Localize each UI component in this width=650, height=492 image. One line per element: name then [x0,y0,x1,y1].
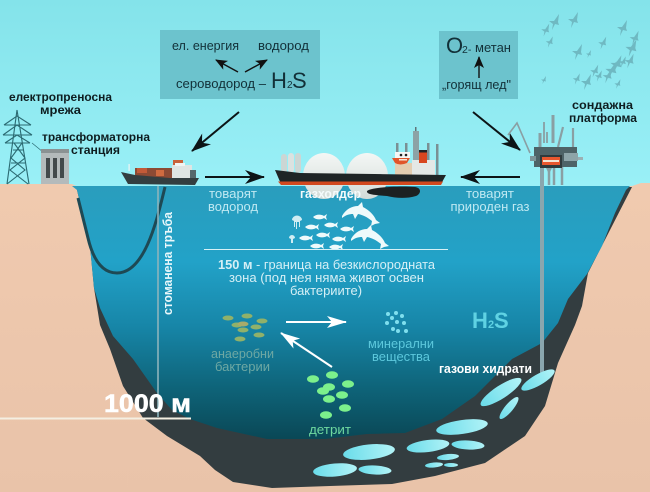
oil slick under gas holder [367,187,420,198]
label: transformer station [42,130,150,157]
label: cargo natural gas: товарят [466,186,514,201]
label: transformer station: станция [71,143,120,157]
icon: gas holder ship [275,127,446,199]
panel: methane from burning ice: метан [475,41,511,55]
icon: power pylon [3,110,43,184]
panel: hydrogen sulfide uses: сероводород – [176,77,266,91]
arrow: hydrogen cargo to gas holder [205,176,264,178]
panel: methane from burning ice: O [446,33,463,58]
label: gas holder: газхолдер [300,187,361,201]
label: H2S in deep water: S [494,308,509,333]
label: gas hydrates: газови хидрати [439,362,532,376]
label: mineral substances: вещества [372,349,431,364]
arrow: natural gas cargo to gas holder [461,176,520,178]
icon: dolphins [342,202,389,249]
pipe: steel pipe [157,186,159,417]
arrow: methane panel to platform [473,112,520,150]
label: cargo natural gas [450,186,530,214]
label: H2S in deep water: H [472,308,488,333]
icon: transformer station [41,149,69,184]
text: 150 m anoxic zone boundary [218,257,436,298]
icon: detritus [307,371,354,419]
panel: hydrogen sulfide uses: 2 [287,80,293,91]
cable: flexible hose to shore [78,187,165,273]
label: mineral substances [368,336,434,364]
arrow: detritus to bacteria [281,333,332,367]
gas hydrate deposits [313,366,557,478]
label: drilling platform: платформа [569,111,637,125]
label: power grid: мрежа [40,103,81,117]
panel: methane from burning ice [439,31,518,99]
icon: flock of birds [541,12,639,90]
label: anaerobic bacteria [211,346,274,374]
label: cargo hydrogen: товарят [209,186,257,201]
text: 150 m anoxic zone boundary: зона (под нея няма живот освен [229,270,424,285]
label: cargo hydrogen: водород [208,199,258,214]
label: mineral substances: минерални [368,336,434,351]
panel: methane from burning ice: 2- [462,44,472,56]
panel: methane from burning ice: „горящ лед" [442,78,511,92]
depth marker: 1000 m: 1000 м [104,390,191,418]
icon: drilling platform [508,115,583,185]
text: 150 m anoxic zone boundary: бактериите) [290,283,362,298]
sky [0,0,650,187]
sea water [72,186,630,439]
panel: hydrogen sulfide uses: S [292,68,307,93]
label: anaerobic bacteria: анаеробни [211,346,274,361]
panel: hydrogen sulfide uses: ел. енергия [172,39,239,53]
label: steel pipe: стоманена тръба [161,211,175,315]
divider: 150 m boundary line [204,248,448,250]
icon: anaerobic bacteria [222,314,268,342]
icon: marine life [289,202,389,250]
panel: hydrogen sulfide uses: водород [258,39,310,53]
label: H2S in deep water: 2 [488,319,494,331]
arrow: H2S panel to tanker [192,112,239,151]
label: drilling platform [569,98,637,125]
label: drilling platform: сондажна [572,98,633,112]
label: transformer station: трансформаторна [42,130,150,144]
arrow: bacteria to minerals [286,321,346,323]
label: anaerobic bacteria: бактерии [215,359,270,374]
label: cargo hydrogen [208,186,258,214]
text: 150 m anoxic zone boundary: 150 м - граница на безкислородната [218,257,436,272]
label: cargo natural gas: природен газ [450,199,530,214]
label: power grid [9,90,112,117]
land: seabed rock and coasts [0,183,650,492]
icon: hydrogen tanker ship [121,160,199,185]
panel: hydrogen sulfide uses: H [271,68,287,93]
label: power grid: електропреносна [9,90,112,104]
icon: mineral particles [385,311,408,333]
drill string to hydrate deposit [540,168,544,376]
label: detritus: детрит [309,422,351,437]
sediment layer: dark seabed [77,187,632,488]
panel: hydrogen sulfide uses [160,30,320,99]
label: H2S in deep water [472,308,509,333]
